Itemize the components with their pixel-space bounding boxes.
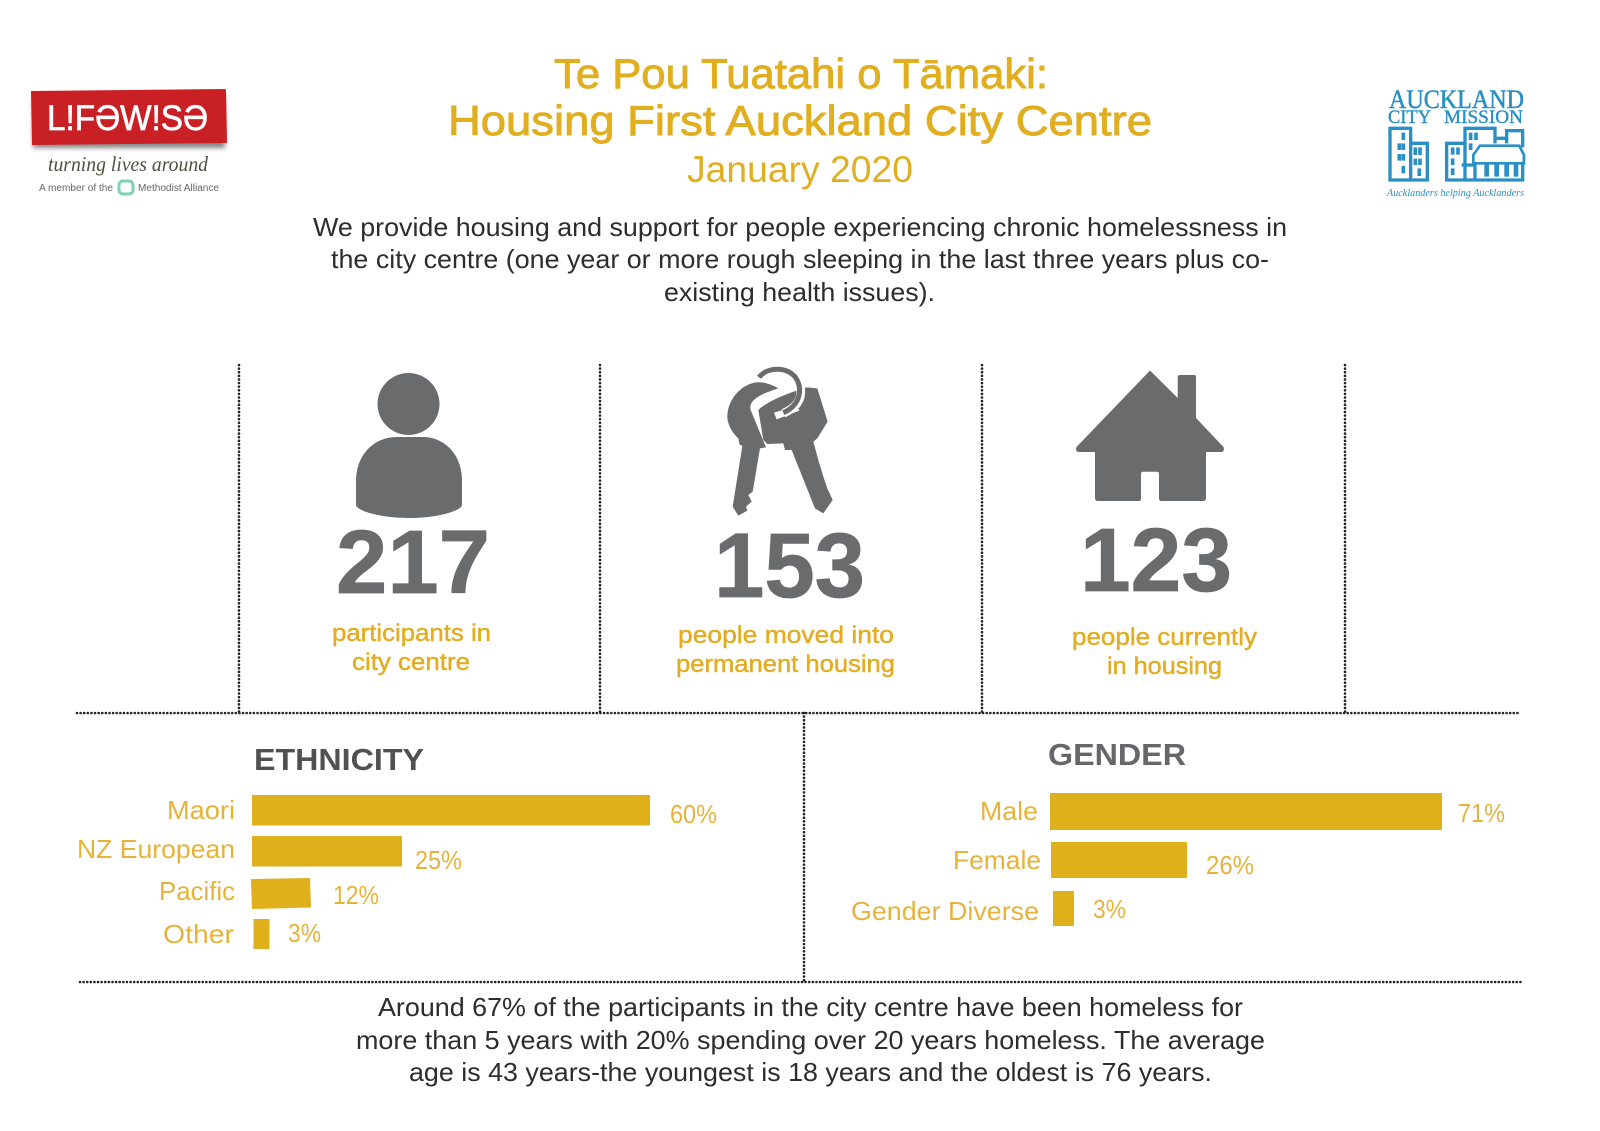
logo: Lifewise: turning lives around [48,152,208,176]
row: Other: Other [163,919,234,949]
row: Maori: Maori [167,795,235,825]
heading: ethnicity: ETHNICITY [254,742,424,777]
label: people currently in housing [1072,624,1257,680]
logo: Lifewise: L!FƏW!SƏ [47,99,208,138]
row: Pacific [159,876,379,910]
icon: person [356,373,462,518]
logo: Lifewise: A member of the [39,183,113,194]
row: Male [980,793,1505,830]
summary text: more than 5 years with 20% spending over 20 years homeless. The average [356,1025,1265,1055]
number: 123: 123 [1080,511,1232,611]
row: NZ European [77,834,462,875]
label: people currently in housing: people currently [1072,624,1257,651]
logo: Auckland City Mission: MISSION [1444,107,1523,128]
number: 217: 217 [336,513,490,613]
icon: keys [727,369,833,516]
date: January 2020 [687,149,913,190]
row: Female: Female [953,845,1041,875]
label: participants in city centre: participants in [332,620,491,647]
logo: Auckland City Mission: Aucklanders helping Aucklanders [1386,188,1524,199]
intro text: existing health issues). [664,277,935,307]
row: Maori: 60% [670,799,717,829]
row: Gender Diverse: Gender Diverse [851,896,1039,926]
logo: Lifewise: Methodist Alliance [138,183,219,194]
logo: Auckland City Mission: CITY [1388,107,1431,128]
heading: gender: GENDER [1048,737,1186,772]
summary text [356,992,1265,1087]
label: participants in city centre [332,620,491,676]
panel: currently housed [1072,370,1257,680]
row: Gender Diverse: 3% [1093,894,1126,924]
panel: participants [332,373,491,676]
row: Maori [167,795,717,829]
row: Pacific: 12% [333,880,379,910]
label: participants in city centre: city centre [352,649,470,676]
number: 153: 153 [714,515,865,617]
row: Male: 71% [1458,798,1505,828]
logo: Auckland City Mission [1386,85,1524,199]
row: NZ European: NZ European [77,834,235,864]
row: Pacific: Pacific [159,876,235,906]
row: NZ European: 25% [415,845,462,875]
logo: Lifewise [31,89,227,194]
icon: house [1076,370,1224,501]
title: Housing First Auckland City Centre [448,97,1152,144]
row: Other: 3% [288,918,321,948]
label: people currently in housing: in housing [1107,653,1222,680]
title [448,50,1152,144]
label: people moved into permanent housing: permanent housing [676,651,895,678]
panel: gender chart [851,737,1505,926]
row: Gender Diverse [851,891,1126,926]
summary text: age is 43 years-the youngest is 18 years and the oldest is 76 years. [409,1057,1212,1087]
panel: moved into housing [676,369,895,678]
panel: ethnicity chart [77,742,717,949]
intro text: the city centre (one year or more rough sleeping in the last three years plus co- [331,244,1269,274]
label: people moved into permanent housing: people moved into [678,622,894,649]
title: Te Pou Tuatahi o Tāmaki: [554,50,1048,97]
intro text [313,212,1287,307]
row: Female: 26% [1206,850,1254,880]
row: Male: Male [980,796,1038,826]
row: Female [953,842,1254,880]
logo: Auckland City Mission: AUCKLAND [1389,85,1524,114]
row: Other [163,918,321,949]
summary text: Around 67% of the participants in the city centre have been homeless for [378,992,1243,1022]
intro text: We provide housing and support for people experiencing chronic homelessness in [313,212,1287,242]
label: people moved into permanent housing [676,622,895,678]
